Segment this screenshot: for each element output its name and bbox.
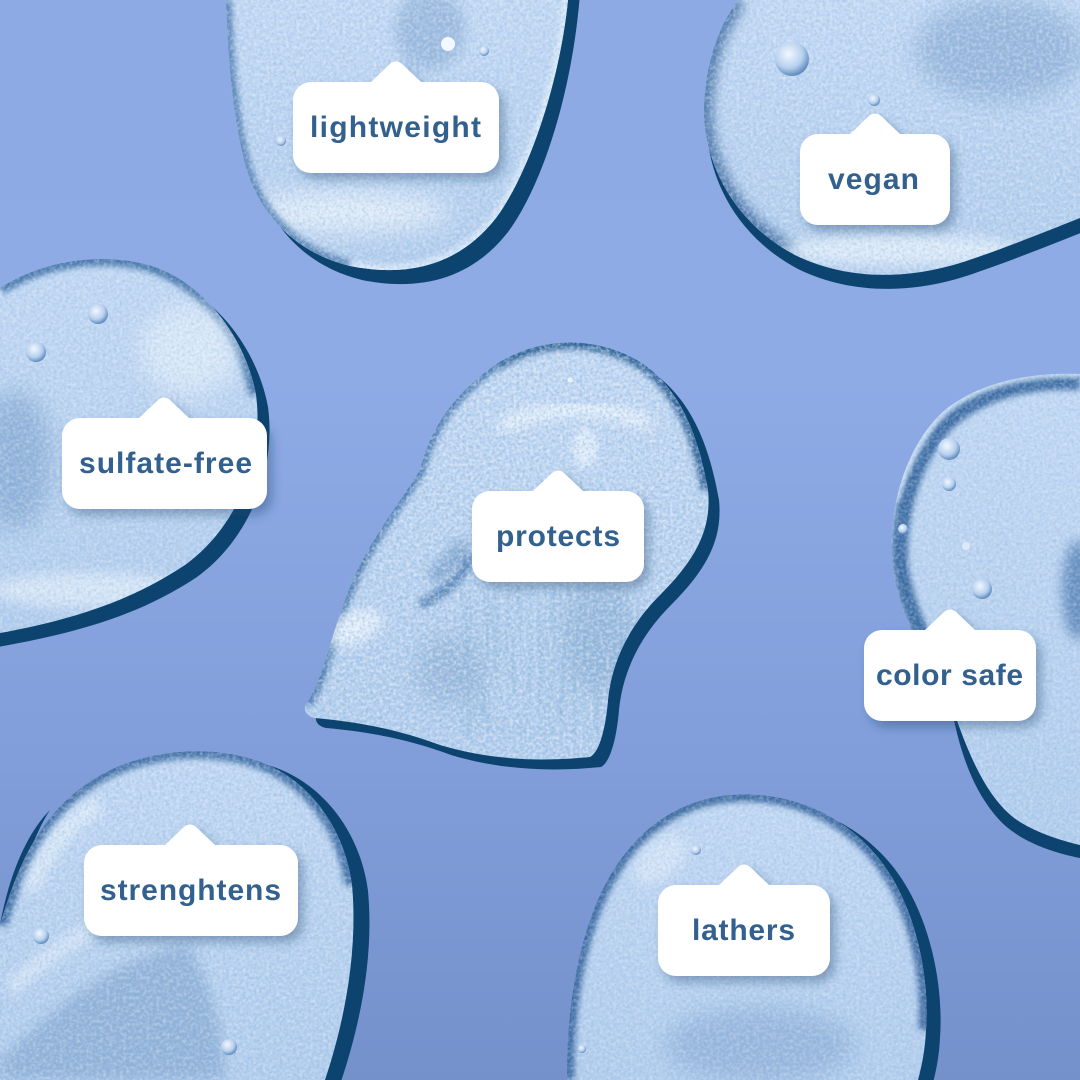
label: strenghtens xyxy=(84,824,298,936)
label: vegan: vegan xyxy=(828,163,919,196)
label: color safe: color safe xyxy=(876,659,1023,692)
gel swatch: top right xyxy=(700,0,1080,289)
gel swatch: right xyxy=(885,370,1080,858)
label: strenghtens: strenghtens xyxy=(100,874,281,907)
gel swatch: bottom centre xyxy=(560,790,941,1080)
label: sulfate-free xyxy=(62,398,267,509)
label: color safe xyxy=(864,610,1036,721)
label: lathers: lathers xyxy=(692,914,795,947)
label: protects xyxy=(472,470,644,582)
label: sulfate-free: sulfate-free xyxy=(79,447,252,480)
label: lightweight: lightweight xyxy=(310,111,481,144)
gel swatch: bottom left xyxy=(0,745,369,1080)
gel swatch: top centre xyxy=(220,0,580,284)
label: vegan xyxy=(800,114,950,225)
gel swatch: left xyxy=(0,250,270,648)
label: protects: protects xyxy=(496,520,620,553)
label: lathers xyxy=(658,864,830,976)
gel swatch: centre xyxy=(300,335,720,769)
label: lightweight xyxy=(293,62,499,173)
